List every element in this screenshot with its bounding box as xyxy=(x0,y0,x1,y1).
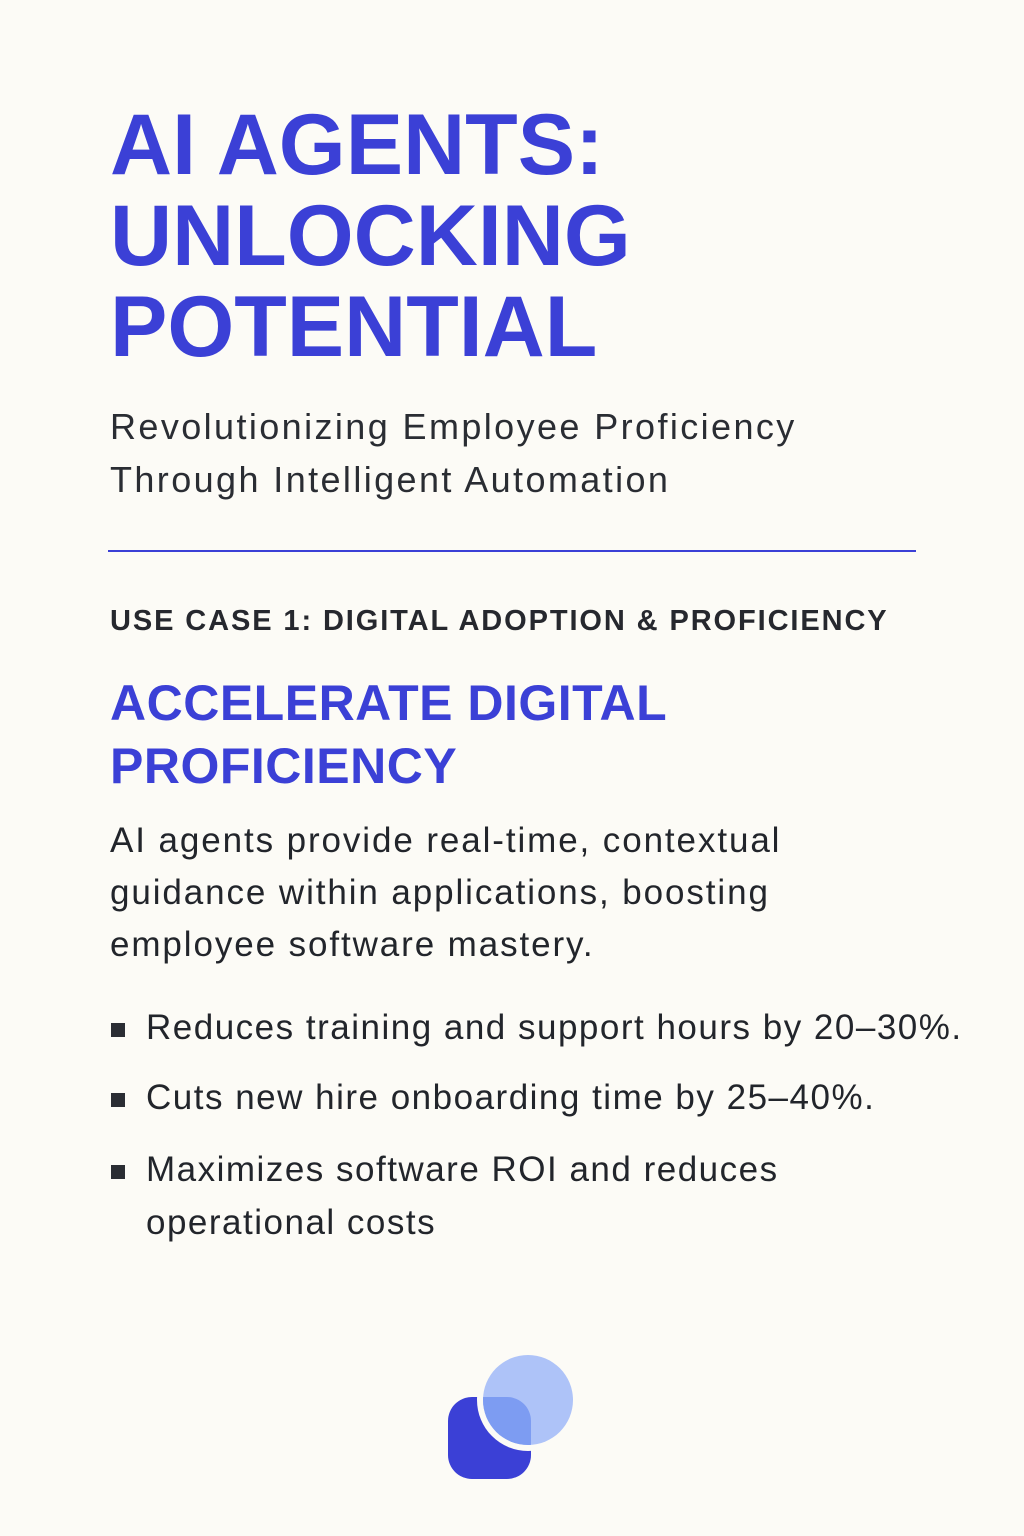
bullet 2: Cuts new hire onboarding time by 25–40%. xyxy=(146,1078,875,1117)
title: UNLOCKING xyxy=(110,188,631,284)
body text: guidance within applications, boosting xyxy=(110,873,770,912)
bullet 3 xyxy=(111,1150,779,1242)
subtitle: Through Intelligent Automation xyxy=(110,459,670,500)
section heading xyxy=(110,675,667,794)
bullet 1: Reduces training and support hours by 20–30%. xyxy=(146,1008,963,1047)
body text: AI agents provide real-time, contextual xyxy=(110,821,781,860)
title: AI AGENTS: xyxy=(110,97,604,193)
icon: logo xyxy=(448,1355,573,1479)
bullet list xyxy=(111,1008,963,1242)
body text: employee software mastery. xyxy=(110,925,594,964)
body text xyxy=(110,821,781,964)
bullet 3: Maximizes software ROI and reduces xyxy=(146,1150,779,1189)
title xyxy=(110,97,631,375)
subtitle xyxy=(110,406,797,500)
section heading: PROFICIENCY xyxy=(110,738,457,794)
subtitle: Revolutionizing Employee Proficiency xyxy=(110,406,797,447)
bullet 3: operational costs xyxy=(146,1203,436,1242)
use case label: USE CASE 1: DIGITAL ADOPTION & PROFICIENCY xyxy=(110,605,889,637)
section heading: ACCELERATE DIGITAL xyxy=(110,675,667,731)
title: POTENTIAL xyxy=(110,279,597,375)
